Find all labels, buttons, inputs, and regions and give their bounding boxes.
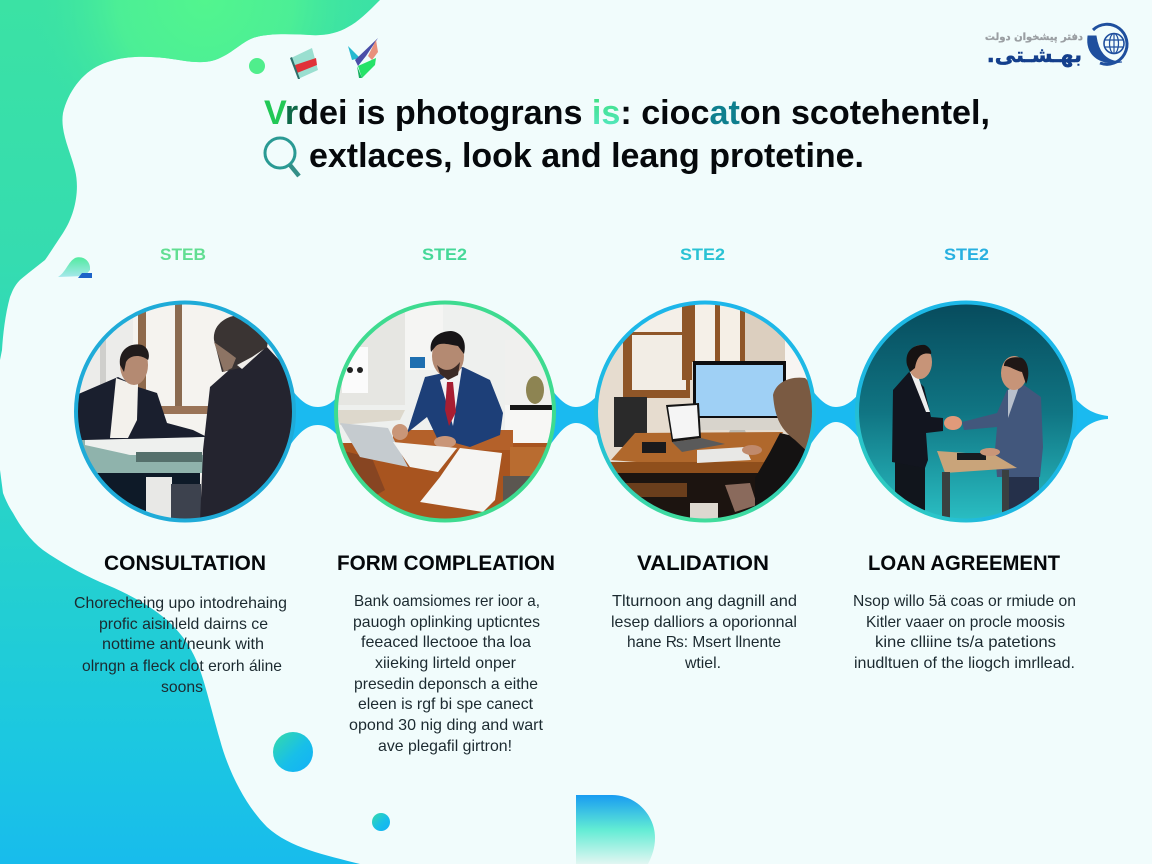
description: consultation: nottime ant/neunk with <box>102 636 264 653</box>
description: form completion: presedin deponsch a eithe <box>354 676 538 693</box>
title <box>264 94 990 175</box>
description: form completion: feeaced llectooe tha loa <box>361 634 531 651</box>
ring <box>76 302 294 520</box>
description: consultation: profic aisinleld dairns ce <box>99 616 268 633</box>
description: validation: Tlturnoon ang dagnill and <box>612 593 797 610</box>
description: form completion <box>349 593 544 755</box>
logo emblem <box>1088 24 1127 64</box>
description: form completion: xiieking lirteld onper <box>375 655 517 672</box>
photo: consultation meeting <box>70 295 300 530</box>
icon: magnifier <box>265 138 299 176</box>
description: validation: lesep dalliors a oporionnal <box>611 614 797 631</box>
title line one: Vrdei is photograns is: ciocaton scotehentel, <box>264 94 990 132</box>
icon: check and leaf <box>348 38 378 78</box>
icon: flag <box>290 48 318 79</box>
description: validation: hane ₨: Msert llnente <box>627 634 781 651</box>
person: man signing papers <box>392 331 503 448</box>
title line two: extlaces, look and leang protetine. <box>309 137 864 175</box>
timeline connectors <box>288 385 1108 448</box>
small table <box>937 448 1017 522</box>
heading: consultation: CONSULTATION <box>104 552 266 575</box>
person: man in blue suit <box>962 356 1043 520</box>
step 4 text <box>853 552 1076 672</box>
description: loan agreement: inudltuen of the liogch imrllead. <box>854 655 1075 672</box>
person: woman at desk <box>742 378 813 512</box>
photo: validation <box>590 295 820 530</box>
step label 2: STE2 <box>422 245 467 264</box>
half-round gradient shape <box>576 795 655 864</box>
description: consultation <box>74 595 287 696</box>
description: form completion: ave plegafil girtron! <box>378 738 512 755</box>
description: consultation: Chorecheing upo intodrehaing <box>74 595 287 612</box>
gradient dot large <box>273 732 313 772</box>
description: form completion: Bank oamsiomes rer ioor a, <box>354 593 540 610</box>
description: form completion: pauogh oplinking upticntes <box>353 614 540 631</box>
ring <box>857 302 1075 520</box>
description: validation: wtiel. <box>684 655 721 672</box>
description: validation <box>611 593 797 672</box>
step label 3: STE2 <box>680 245 725 264</box>
step 1 text <box>74 552 287 696</box>
description: loan agreement <box>853 593 1076 672</box>
person: left man <box>76 344 207 440</box>
step 2 text <box>337 552 555 755</box>
gradient dot small <box>372 813 390 831</box>
logo text <box>985 32 1083 67</box>
logo text: دفتر پیشخوان دولت <box>985 32 1083 43</box>
heading: loan agreement: LOAN AGREEMENT <box>868 552 1060 575</box>
monitor screen <box>696 365 783 416</box>
handshake <box>944 416 962 430</box>
description: loan agreement: Nsop willo 5ä coas or rmiude on <box>853 593 1076 610</box>
step labels <box>160 245 989 264</box>
person: man in black suit <box>892 345 943 520</box>
description: consultation: olrngn a fleck clot erorh áline <box>82 658 282 675</box>
decorative gradient blob <box>0 0 380 864</box>
description: form completion: eleen is rgf bi spe canect <box>358 696 534 713</box>
description: loan agreement: kine clliine ts/a patetions <box>875 634 1056 651</box>
logo text: بهـشـتی. <box>987 43 1082 67</box>
photo: form completion <box>330 295 560 530</box>
heading: form completion: FORM COMPLEATION <box>337 552 555 575</box>
laptop <box>666 403 725 452</box>
heading: validation: VALIDATION <box>637 552 769 575</box>
description: loan agreement: Kitler vaaer on procle moosis <box>866 614 1065 631</box>
ring <box>336 302 554 520</box>
logo <box>985 24 1127 67</box>
person: man seen from behind <box>200 315 296 522</box>
step label 1: STEB <box>160 245 206 264</box>
description: consultation: soons <box>161 679 203 696</box>
ring <box>596 302 814 520</box>
description: form completion: opond 30 nig ding and wart <box>349 717 544 734</box>
step 3 text <box>611 552 797 672</box>
photo: loan agreement handshake <box>855 300 1076 522</box>
step label 4: STE2 <box>944 245 989 264</box>
green dot <box>249 58 265 74</box>
small cloud shape <box>58 257 92 278</box>
